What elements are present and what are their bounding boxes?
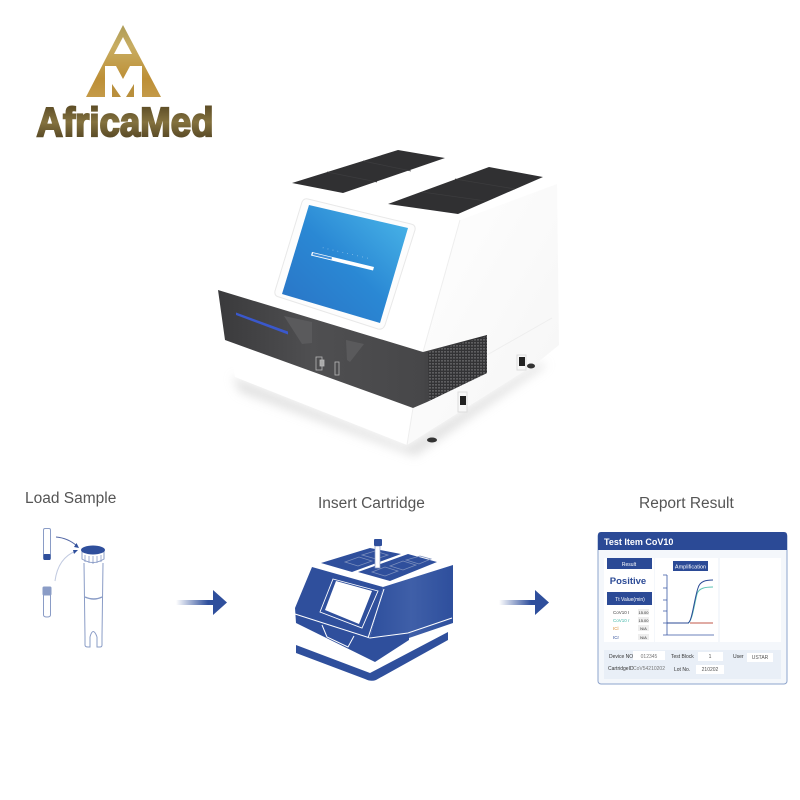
- logo: AfricaMed: [36, 25, 214, 145]
- curved arrows to tube: [55, 537, 79, 581]
- logo wordmark: AfricaMed: [36, 99, 214, 145]
- Tt value table: [613, 609, 649, 640]
- panel header: [598, 532, 787, 550]
- device info row: Lot No.: [674, 667, 690, 673]
- device info row: Device NO.: [609, 654, 635, 660]
- vent grille: [428, 336, 487, 401]
- device info row: USTAR: [752, 655, 769, 661]
- panel frame: [598, 533, 787, 684]
- slot notch: [322, 625, 354, 647]
- step label: Insert Cartridge: Insert Cartridge: [318, 495, 425, 512]
- result column: Result: [622, 562, 637, 568]
- device info row: CoV54210202: [633, 666, 665, 672]
- small swab tube: [44, 528, 50, 560]
- touch screen: [282, 205, 408, 323]
- side seam lines: [407, 220, 552, 445]
- device info row: 1: [709, 654, 712, 660]
- instrument right face: [370, 565, 453, 638]
- amplification chart: [655, 558, 718, 642]
- header title: Test Item CoV10: [604, 537, 673, 547]
- Tt value table: CoV10 I: [613, 610, 629, 615]
- blue light strip: [236, 312, 288, 334]
- positive label: Positive: [610, 576, 646, 587]
- right side ports: [517, 355, 526, 370]
- step label: Report Result: Report Result: [639, 495, 734, 512]
- screen bezel: [275, 199, 415, 329]
- Tt value table: CoV10 r: [613, 618, 630, 623]
- Tt value table: 15.00: [638, 618, 649, 623]
- device body: [218, 143, 559, 445]
- arrow 1: [176, 590, 227, 615]
- device shadow: [232, 364, 548, 456]
- Tt value table: 15.00: [638, 610, 649, 615]
- tray left: [292, 150, 445, 193]
- large sample tube: [81, 546, 105, 647]
- device info row: 012345: [641, 654, 658, 660]
- device right side: [407, 184, 559, 445]
- result column: [604, 558, 654, 642]
- door notch: [284, 316, 312, 344]
- device photograph: [218, 143, 559, 456]
- blank chart area: [720, 558, 781, 642]
- seam lines: [295, 589, 452, 638]
- amplification chart: Amplification: [675, 564, 706, 570]
- result column: Tt Value(min): [615, 597, 645, 603]
- step label: Load Sample: Load Sample: [25, 490, 116, 507]
- icon: sample tubes: [43, 528, 105, 647]
- Tt value table: ICr: [613, 635, 620, 640]
- device info row: [604, 650, 781, 679]
- Tt value table: N/A: [640, 626, 647, 631]
- feet: [427, 438, 437, 442]
- instrument screen: [320, 579, 378, 628]
- tray right: [388, 167, 543, 214]
- instrument base: [296, 632, 448, 681]
- cartridge: [374, 539, 382, 568]
- device info row: User: [733, 654, 744, 660]
- device info row: CartridgeID: [608, 666, 634, 672]
- instrument trays: [321, 548, 437, 581]
- device info row: Test Block: [671, 654, 694, 660]
- device info row: 210202: [702, 667, 719, 673]
- logo mark: gold triangle with A and M: [86, 25, 161, 97]
- Tt value table: ICl: [613, 626, 618, 631]
- arrow 2: [499, 590, 549, 615]
- report result panel: [598, 532, 787, 684]
- dark front band: [218, 290, 487, 408]
- instrument front face: [295, 567, 409, 662]
- tray panel seams: [327, 161, 515, 201]
- Tt value table: N/A: [640, 635, 647, 640]
- screen loading text: · · · · · · · · · ·: [322, 245, 370, 262]
- loading bar: [311, 252, 374, 270]
- small capped vial: [43, 587, 51, 617]
- icon: blue instrument: [295, 539, 453, 681]
- front icons: [316, 357, 339, 375]
